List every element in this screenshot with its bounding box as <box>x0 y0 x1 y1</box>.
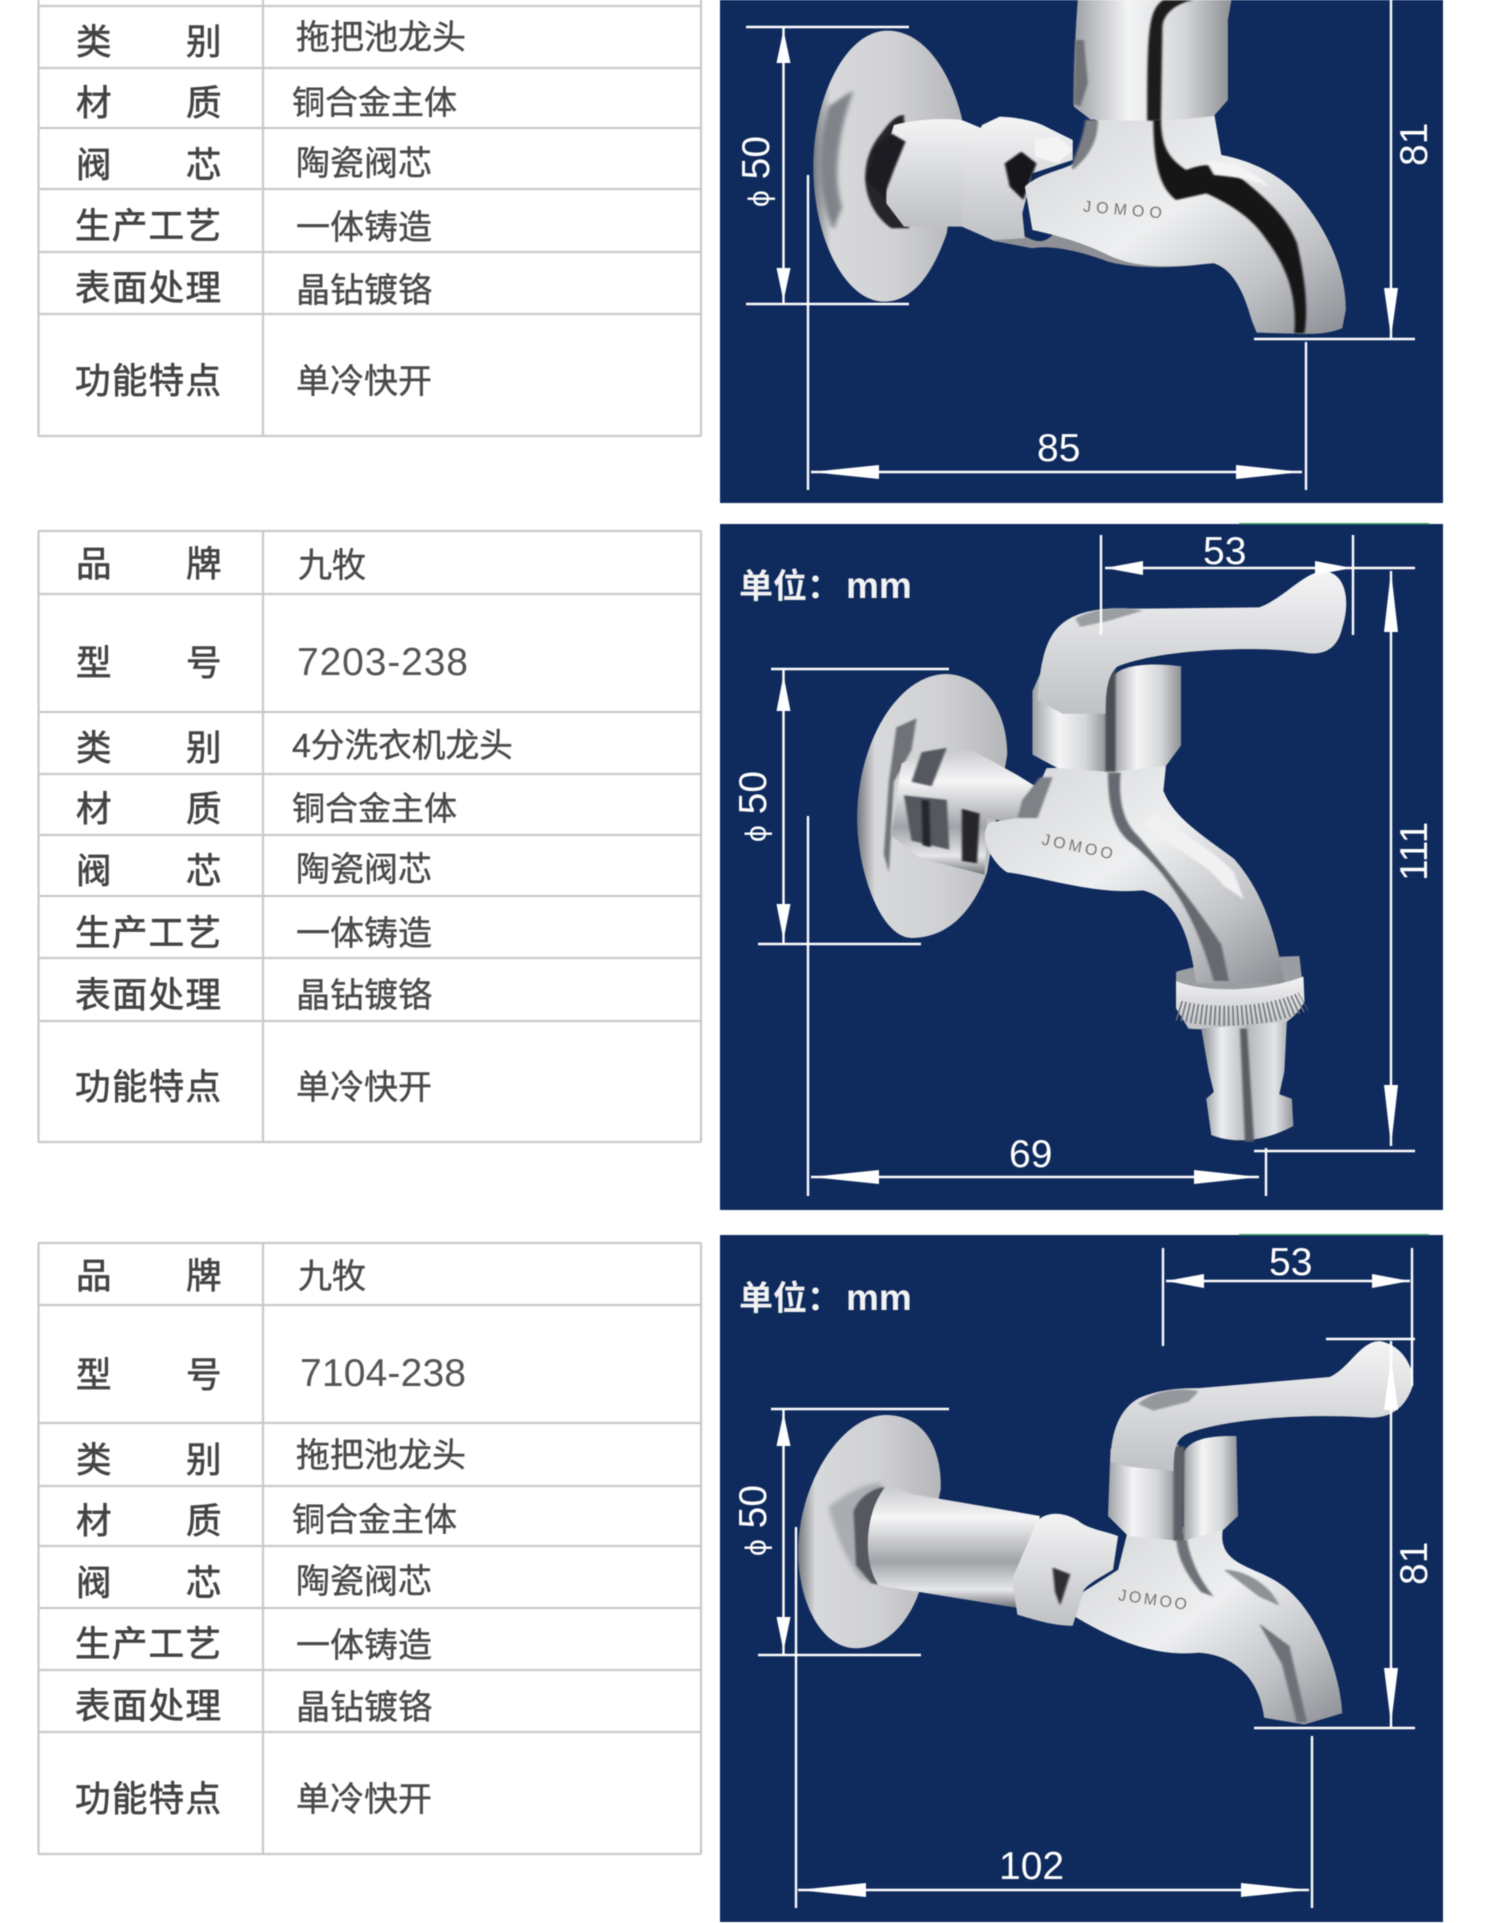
dimension 53: 53 <box>1203 530 1246 573</box>
row: 生产工艺 <box>75 913 432 953</box>
row: 类别 <box>76 19 466 62</box>
dimension 102 <box>796 1527 1312 1908</box>
row: 材质: 铜合金主体 <box>292 790 457 827</box>
row: 材质 <box>76 789 457 829</box>
row: 阀芯: 阀芯 <box>76 1563 222 1603</box>
row: 型号 <box>76 641 468 684</box>
panel 3: faucet diagram, blue background <box>720 1234 1443 1922</box>
row: 品牌: 品牌 <box>76 544 222 584</box>
row: 品牌: 品牌 <box>76 1256 222 1296</box>
row: 类别: 拖把池龙头 <box>296 19 466 57</box>
panel 1: faucet diagram, blue background <box>720 0 1443 503</box>
row: 功能特点 <box>75 1779 432 1819</box>
row: 生产工艺: 生产工艺 <box>75 1624 221 1664</box>
row: 阀芯: 阀芯 <box>76 145 222 185</box>
faucet 2 illustration <box>857 571 1346 1142</box>
row: 功能特点 <box>75 361 432 401</box>
dimension 81: 81 <box>1393 1542 1436 1585</box>
row: 表面处理: 晶钻镀铬 <box>296 272 432 310</box>
table 1: 拖把池龙头 specifications (continued from above) <box>38 0 701 436</box>
dimension 111 <box>1254 571 1436 1151</box>
row: 表面处理: 表面处理 <box>75 268 221 308</box>
row: 功能特点: 功能特点 <box>75 1779 221 1819</box>
dimension φ50: ϕ 50 <box>735 136 778 207</box>
row: 表面处理: 表面处理 <box>75 975 221 1015</box>
row: 阀芯 <box>76 851 432 891</box>
row: 类别: 拖把池龙头 <box>296 1437 466 1475</box>
dimension 81: 81 <box>1393 123 1436 166</box>
table 2: 7203-238 specifications <box>38 531 701 1142</box>
row: 表面处理: 晶钻镀铬 <box>296 1689 432 1727</box>
dimension 111: 111 <box>1393 822 1436 881</box>
row: 阀芯: 陶瓷阀芯 <box>296 851 432 889</box>
dimension 81 <box>1254 0 1436 339</box>
row: 功能特点: 功能特点 <box>75 361 221 401</box>
row: 生产工艺: 一体铸造 <box>296 915 432 953</box>
row: 表面处理 <box>75 975 432 1015</box>
unit label: mm <box>846 565 912 606</box>
row: 材质 <box>76 83 457 123</box>
row: 类别: 类别 <box>76 1440 222 1480</box>
row: 型号: 型号 <box>76 643 222 683</box>
panel 2: faucet diagram, blue background <box>720 523 1443 1210</box>
unit label: mm <box>846 1277 912 1318</box>
row: 表面处理: 晶钻镀铬 <box>296 977 432 1015</box>
row: 类别: 类别 <box>76 728 222 768</box>
dimension 53 <box>1163 1241 1412 1386</box>
row: 类别: 类别 <box>76 22 222 62</box>
row: 生产工艺: 一体铸造 <box>296 209 432 247</box>
thin green top edge <box>1239 523 1429 524</box>
dimension 53 <box>1101 530 1415 635</box>
unit label: 单位： <box>739 1280 841 1318</box>
row: 品牌: 九牧 <box>298 1258 366 1296</box>
table 3: 7104-238 specifications <box>38 1243 701 1854</box>
row: 品牌 <box>76 544 366 585</box>
dimension φ50 <box>732 1409 949 1655</box>
row: 表面处理 <box>75 1686 432 1727</box>
row: 型号 <box>76 1352 466 1395</box>
dimension 102: 102 <box>999 1845 1064 1888</box>
dimension φ50 <box>732 669 949 944</box>
row: 阀芯: 陶瓷阀芯 <box>296 1563 432 1601</box>
dimension 69: 69 <box>1009 1133 1052 1176</box>
row: 阀芯: 阀芯 <box>76 851 222 891</box>
row: 生产工艺: 生产工艺 <box>75 206 221 246</box>
row: 类别 <box>76 1437 466 1480</box>
dimension 81 <box>1254 1339 1436 1728</box>
row: 型号: 型号 <box>76 1355 222 1395</box>
row: 材质: 铜合金主体 <box>292 1501 457 1538</box>
row: 生产工艺: 一体铸造 <box>296 1627 432 1665</box>
unit label: 单位： <box>739 568 841 606</box>
dimension 53: 53 <box>1269 1241 1312 1284</box>
faucet 2 brand mark: JOMOO <box>1040 832 1115 863</box>
dimension φ50: ϕ 50 <box>732 771 775 842</box>
row: 生产工艺 <box>75 1624 432 1665</box>
row: 材质: 材质 <box>76 789 222 829</box>
row: 功能特点: 单冷快开 <box>296 363 432 401</box>
thin green top edge <box>1239 1234 1429 1236</box>
row: 阀芯: 陶瓷阀芯 <box>296 145 432 183</box>
row: 功能特点: 功能特点 <box>75 1067 221 1107</box>
row: 阀芯 <box>76 145 432 185</box>
row: 功能特点: 单冷快开 <box>296 1069 432 1107</box>
dimension 85 <box>808 175 1306 490</box>
faucet 3 brand mark: JOMOO <box>1117 1587 1189 1614</box>
row: 类别 <box>76 727 513 768</box>
row: 功能特点: 单冷快开 <box>296 1781 432 1819</box>
row: 材质: 材质 <box>76 83 222 123</box>
dimension φ50: ϕ 50 <box>732 1485 775 1556</box>
faucet 1 illustration <box>813 0 1346 334</box>
row: 阀芯 <box>76 1563 432 1603</box>
row: 材质: 材质 <box>76 1501 222 1541</box>
row: 品牌: 九牧 <box>298 547 366 585</box>
row: 类别: 4分洗衣机龙头 <box>292 727 513 765</box>
row: 型号: 7203-238 <box>297 641 468 684</box>
faucet 1 brand mark: JOMOO <box>1082 199 1164 222</box>
row: 品牌 <box>76 1256 366 1296</box>
row: 材质 <box>76 1501 457 1541</box>
dimension 85: 85 <box>1037 427 1080 470</box>
row: 功能特点 <box>75 1067 432 1107</box>
row: 材质: 铜合金主体 <box>292 84 457 121</box>
dimension φ50 <box>735 27 909 304</box>
row: 生产工艺 <box>75 206 432 247</box>
row: 型号: 7104-238 <box>300 1352 466 1395</box>
row: 表面处理: 表面处理 <box>75 1686 221 1726</box>
row: 生产工艺: 生产工艺 <box>75 913 221 953</box>
faucet 3 illustration <box>798 1341 1413 1724</box>
row: 表面处理 <box>75 268 432 310</box>
dimension 69 <box>808 816 1266 1196</box>
